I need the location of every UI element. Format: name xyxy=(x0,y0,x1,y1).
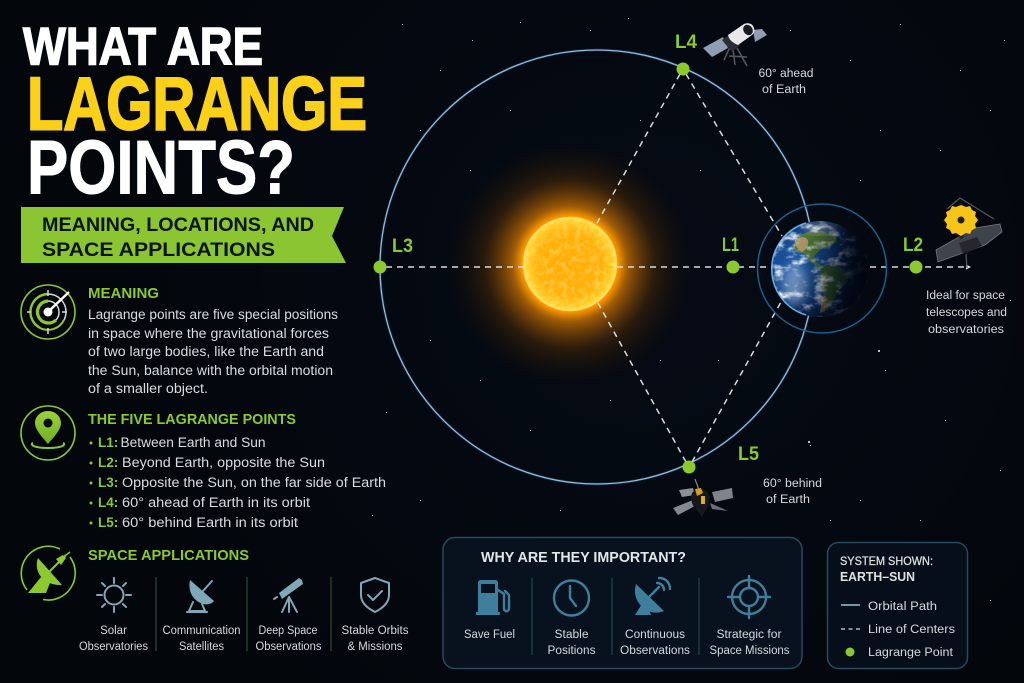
L5 point xyxy=(682,444,759,474)
five points list: L4: xyxy=(98,495,118,510)
L3 point xyxy=(374,236,413,274)
five points list: THE FIVE LAGRANGE POINTS xyxy=(88,411,296,428)
title: LAGRANGE xyxy=(27,62,367,146)
L3 point: L3 xyxy=(392,236,413,257)
panel: legend: EARTH–SUN xyxy=(840,570,915,584)
application: stable orbits xyxy=(342,578,409,653)
application: deep space observations xyxy=(256,578,322,653)
L1 point xyxy=(722,235,740,274)
L5 point: L5 xyxy=(738,444,759,465)
lines of centers xyxy=(386,74,971,462)
panel: legend: SYSTEM SHOWN: xyxy=(840,554,933,568)
icon: L5 satellite xyxy=(673,479,733,517)
panel: why are they important: WHY ARE THEY IMPORTANT? xyxy=(481,550,686,566)
panel: legend xyxy=(828,542,968,668)
meaning text block: in space where the gravitational forces xyxy=(88,326,329,341)
five points list: Opposite the Sun, on the far side of Earth xyxy=(122,475,386,490)
L2 point xyxy=(903,235,923,274)
meaning text block: Lagrange points are five special positions xyxy=(88,307,338,322)
five points list: Between Earth and Sun xyxy=(120,435,266,450)
meaning text block: of two large bodies, like the Earth and xyxy=(88,344,324,359)
starfield xyxy=(372,18,1011,601)
annotation: L2 xyxy=(926,290,1007,336)
application: communication satellites: Communication xyxy=(162,625,240,637)
icon: radar xyxy=(21,285,75,339)
legend: orbital path: Orbital Path xyxy=(868,601,937,613)
application: solar observatories: Observatories xyxy=(79,641,148,653)
panel: why are they important xyxy=(443,538,802,668)
meaning text block: the Sun, balance with the orbital motion xyxy=(88,363,333,378)
application: solar observatories xyxy=(79,578,148,653)
annotation: L2: telescopes and xyxy=(926,307,1007,319)
item: stable positions: Positions xyxy=(548,645,596,657)
L2 point: L2 xyxy=(903,235,923,256)
annotation: L2: Ideal for space xyxy=(926,290,1005,302)
icon: satellite dish xyxy=(21,546,75,600)
legend: line of centers: Line of Centers xyxy=(868,624,955,636)
five points list: L5: xyxy=(98,515,118,530)
five points list: Beyond Earth, opposite the Sun xyxy=(122,455,325,470)
L1 point: L1 xyxy=(722,235,739,256)
annotation: L4 xyxy=(758,68,814,96)
item: continuous observations: Continuous xyxy=(625,629,685,641)
annotation: L5: 60° behind xyxy=(763,478,822,490)
meaning text block xyxy=(88,285,338,396)
item: continuous observations xyxy=(620,578,690,657)
five points list xyxy=(88,411,386,530)
application: stable orbits: & Missions xyxy=(348,641,403,653)
annotation: L5 xyxy=(763,478,822,506)
subtitle ribbon: SPACE APPLICATIONS xyxy=(42,239,275,261)
item: save fuel: Save Fuel xyxy=(464,629,515,641)
annotation: L4: 60° ahead xyxy=(758,68,814,80)
item: continuous observations: Observations xyxy=(620,645,690,657)
subtitle ribbon: MEANING, LOCATIONS, AND xyxy=(42,214,314,236)
icon: map pin xyxy=(21,406,75,460)
item: stable positions: Stable xyxy=(554,629,588,641)
L4 point: L4 xyxy=(675,32,697,53)
item: stable positions xyxy=(548,580,596,657)
five points list: L3: xyxy=(98,475,118,490)
application: deep space observations: Observations xyxy=(256,641,322,653)
item: strategic for space missions: Space Missions xyxy=(710,645,790,657)
five points list: L1: xyxy=(98,435,118,450)
item: strategic for space missions: Strategic for xyxy=(716,629,782,641)
orbital path xyxy=(380,50,814,484)
meaning text block: MEANING xyxy=(88,285,159,302)
item: strategic for space missions xyxy=(710,576,790,657)
application: solar observatories: Solar xyxy=(100,625,127,637)
icon: L2 space telescope xyxy=(936,198,1002,268)
application: deep space observations: Deep Space xyxy=(258,625,318,637)
item: save fuel xyxy=(464,580,515,641)
five points list: L2: xyxy=(98,455,118,470)
five points list: 60° ahead of Earth in its orbit xyxy=(122,495,310,510)
space applications: SPACE APPLICATIONS xyxy=(88,547,249,564)
sun glow xyxy=(445,139,695,389)
legend: lagrange point: Lagrange Point xyxy=(868,647,954,659)
annotation: L5: of Earth xyxy=(766,494,810,506)
title xyxy=(23,18,367,210)
sun xyxy=(523,217,617,311)
title: WHAT ARE xyxy=(23,18,263,76)
title: POINTS? xyxy=(27,126,295,210)
five points list: 60° behind Earth in its orbit xyxy=(122,515,298,530)
application: stable orbits: Stable Orbits xyxy=(342,625,409,637)
annotation: L4: of Earth xyxy=(762,84,806,96)
meaning text block: of a smaller object. xyxy=(88,381,208,396)
application: communication satellites xyxy=(162,580,240,653)
L4 point xyxy=(675,32,697,76)
subtitle ribbon xyxy=(21,207,346,263)
space applications xyxy=(79,547,409,653)
application: communication satellites: Satellites xyxy=(179,641,224,653)
icon: L4 satellite xyxy=(703,23,767,66)
annotation: L2: observatories xyxy=(928,324,1004,336)
earth xyxy=(758,204,886,333)
